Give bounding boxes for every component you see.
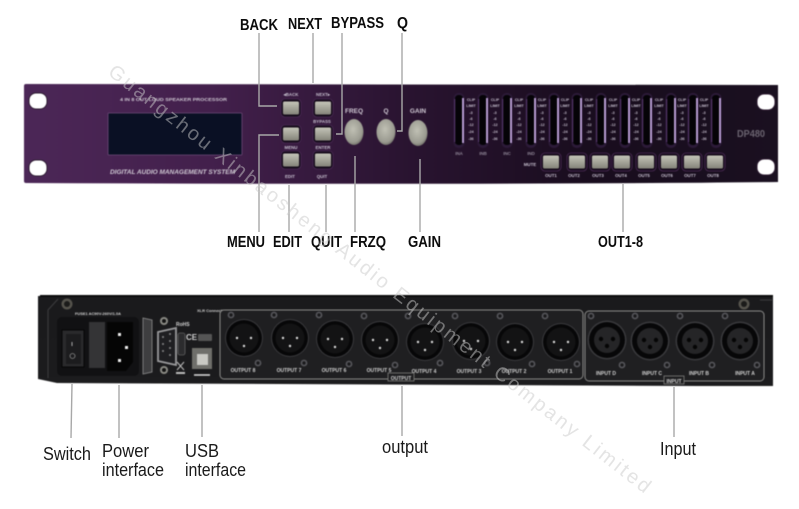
- front panel of processor: [24, 84, 778, 184]
- front panel labels: [227, 15, 643, 251]
- level meters: LIMIT: [490, 104, 500, 108]
- input group: INPUT C: [642, 371, 662, 377]
- input group: INPUT B: [689, 371, 709, 377]
- rear panel labels: Power: [102, 441, 149, 461]
- front panel labels: BYPASS: [331, 15, 384, 32]
- level meters: -6: [657, 117, 661, 121]
- rotary knobs: FREQ: [345, 108, 363, 115]
- level meters: -36: [633, 137, 639, 141]
- connector legend: XLR Connection: [197, 308, 229, 313]
- navigation buttons: BYPASS: [313, 119, 331, 124]
- output group: OUTPUT 7: [277, 368, 302, 374]
- level meters: -3: [657, 111, 661, 115]
- level meters: LIMIT: [466, 104, 476, 108]
- level meters: -24: [701, 130, 707, 134]
- level meters: -36: [516, 137, 522, 141]
- output group: OUTPUT 2: [502, 369, 527, 375]
- output mute buttons: OUT7: [684, 173, 696, 178]
- watermark: Guangzhou Xinbaosheng Audio Equipment Company Limited: [104, 61, 655, 498]
- LCD display: [108, 113, 242, 155]
- front panel labels: FRZQ: [350, 234, 386, 251]
- level meters: -6: [680, 117, 684, 121]
- level meters: INB: [479, 151, 487, 156]
- level meters: CLIP: [585, 98, 594, 102]
- level meters: -24: [516, 130, 522, 134]
- rear panel labels: Switch: [43, 444, 91, 464]
- level meters: -36: [656, 137, 662, 141]
- level meters: -12: [468, 123, 474, 127]
- level meters: -36: [562, 137, 568, 141]
- navigation buttons: ◂BACK: [283, 92, 299, 97]
- level meters: -6: [517, 117, 521, 121]
- level meters: CLIP: [491, 98, 500, 102]
- level meters: -24: [656, 130, 662, 134]
- output mute buttons: OUT8: [707, 173, 719, 178]
- output mute buttons: OUT3: [592, 173, 604, 178]
- level meters: CLIP: [538, 98, 547, 102]
- level meters: LIMIT: [677, 104, 687, 108]
- level meters: IND: [527, 151, 535, 156]
- output group: [220, 310, 583, 382]
- mounting holes: [29, 93, 775, 176]
- output mute buttons: OUT4: [615, 173, 627, 178]
- level meters: -12: [516, 123, 522, 127]
- level meters: LIMIT: [654, 104, 664, 108]
- level meters: -6: [587, 117, 591, 121]
- leader lines: [71, 33, 674, 438]
- input group: [585, 311, 764, 385]
- level meters: -24: [562, 130, 568, 134]
- front panel labels: OUT1-8: [598, 234, 643, 251]
- navigation buttons: NEXT▸: [316, 92, 331, 97]
- output group: OUTPUT 4: [412, 369, 437, 375]
- level meters: -3: [611, 111, 615, 115]
- front panel labels: GAIN: [408, 234, 441, 251]
- level meters: -36: [492, 137, 498, 141]
- front panel labels: NEXT: [288, 16, 322, 33]
- level meters: -3: [563, 111, 567, 115]
- level meters: -6: [702, 117, 706, 121]
- output group: OUTPUT 8: [231, 368, 256, 374]
- level meters: -3: [702, 111, 706, 115]
- rotary knobs: [344, 108, 428, 146]
- level meters: -12: [679, 123, 685, 127]
- rotary knobs: GAIN: [410, 108, 426, 115]
- level meters: LIMIT: [699, 104, 709, 108]
- level meters: -3: [469, 111, 473, 115]
- level meters: -36: [468, 137, 474, 141]
- level meters: -12: [586, 123, 592, 127]
- fuse caption: FUSE1 AC90V-260V/1.0A: [75, 311, 121, 316]
- output group: OUTPUT 5: [367, 368, 392, 374]
- navigation buttons: ENTER: [316, 145, 331, 150]
- serial port: [158, 317, 176, 374]
- front panel labels: MENU: [227, 234, 265, 251]
- level meters: CLIP: [678, 98, 687, 102]
- USB port: [192, 348, 212, 375]
- level meters: INA: [455, 151, 464, 156]
- output mute buttons: MUTE: [524, 162, 536, 167]
- level meters: -3: [634, 111, 638, 115]
- navigation buttons: MENU: [285, 145, 297, 150]
- rear panel labels: interface: [102, 460, 164, 480]
- output mute buttons: OUT5: [638, 173, 650, 178]
- level meters: [454, 93, 722, 156]
- level meters: CLIP: [561, 98, 570, 102]
- level meters: CLIP: [655, 98, 664, 102]
- level meters: -12: [562, 123, 568, 127]
- level meters: -12: [701, 123, 707, 127]
- level meters: -36: [610, 137, 616, 141]
- level meters: -3: [540, 111, 544, 115]
- grounding screws: [62, 298, 750, 310]
- level meters: LIMIT: [584, 104, 594, 108]
- input group: INPUT A: [735, 371, 755, 377]
- level meters: -36: [539, 137, 545, 141]
- level meters: -24: [633, 130, 639, 134]
- level meters: -3: [587, 111, 591, 115]
- output mute buttons: OUT1: [545, 173, 557, 178]
- level meters: -12: [492, 123, 498, 127]
- level meters: -24: [468, 130, 474, 134]
- level meters: -3: [493, 111, 497, 115]
- level meters: -24: [610, 130, 616, 134]
- level meters: -3: [517, 111, 521, 115]
- level meters: -6: [469, 117, 473, 121]
- front panel labels: EDIT: [273, 234, 302, 251]
- level meters: LIMIT: [631, 104, 641, 108]
- output group: OUTPUT 1: [548, 369, 573, 375]
- level meters: -24: [539, 130, 545, 134]
- level meters: -36: [701, 137, 707, 141]
- navigation buttons: [281, 92, 333, 179]
- input group: INPUT: [666, 379, 682, 385]
- level meters: -12: [633, 123, 639, 127]
- rear panel of processor: [38, 296, 773, 386]
- rear panel labels: interface: [185, 460, 246, 480]
- level meters: -6: [493, 117, 497, 121]
- level meters: -12: [656, 123, 662, 127]
- input group: INPUT D: [596, 371, 616, 377]
- power module: [57, 317, 139, 376]
- level meters: -24: [492, 130, 498, 134]
- level meters: CLIP: [467, 98, 476, 102]
- system caption: DIGITAL AUDIO MANAGEMENT SYSTEM: [110, 170, 236, 176]
- output group: OUTPUT 6: [322, 368, 347, 374]
- level meters: -3: [680, 111, 684, 115]
- navigation buttons: EDIT: [285, 174, 295, 179]
- level meters: -6: [563, 117, 567, 121]
- rear panel labels: USB: [185, 441, 219, 461]
- level meters: LIMIT: [560, 104, 570, 108]
- level meters: LIMIT: [514, 104, 524, 108]
- level meters: LIMIT: [537, 104, 547, 108]
- level meters: -36: [586, 137, 592, 141]
- output group: OUTPUT: [391, 376, 411, 382]
- output group: OUTPUT 3: [457, 369, 482, 375]
- navigation buttons: QUIT: [317, 174, 328, 179]
- level meters: CLIP: [515, 98, 524, 102]
- level meters: CLIP: [632, 98, 641, 102]
- rear panel labels: [43, 437, 696, 480]
- level meters: CLIP: [700, 98, 709, 102]
- brand logo strip: [143, 318, 152, 374]
- model heading: 4 IN 8 OUT LOUD SPEAKER PROCESSOR: [120, 97, 228, 102]
- IEC power socket: [107, 322, 133, 371]
- output mute buttons: OUT6: [661, 173, 673, 178]
- rear panel labels: Input: [660, 439, 696, 459]
- rotary knobs: Q: [383, 108, 389, 115]
- compliance marks: RoHS: [176, 322, 190, 328]
- level meters: -12: [610, 123, 616, 127]
- front panel labels: Q: [397, 15, 408, 32]
- level meters: -6: [611, 117, 615, 121]
- level meters: -6: [540, 117, 544, 121]
- rocker switch: [62, 330, 84, 367]
- level meters: INC: [503, 151, 512, 156]
- level meters: LIMIT: [608, 104, 618, 108]
- front panel labels: QUIT: [311, 234, 342, 251]
- level meters: -6: [634, 117, 638, 121]
- compliance marks: CE: [186, 333, 198, 342]
- output mute buttons: [524, 153, 725, 178]
- model number: DP480: [737, 129, 765, 140]
- level meters: -12: [539, 123, 545, 127]
- level meters: -36: [679, 137, 685, 141]
- output mute buttons: OUT2: [568, 173, 580, 178]
- compliance marks: [176, 322, 212, 374]
- front panel labels: BACK: [240, 17, 278, 34]
- level meters: -24: [586, 130, 592, 134]
- rear panel labels: output: [382, 437, 428, 457]
- level meters: CLIP: [609, 98, 618, 102]
- level meters: -24: [679, 130, 685, 134]
